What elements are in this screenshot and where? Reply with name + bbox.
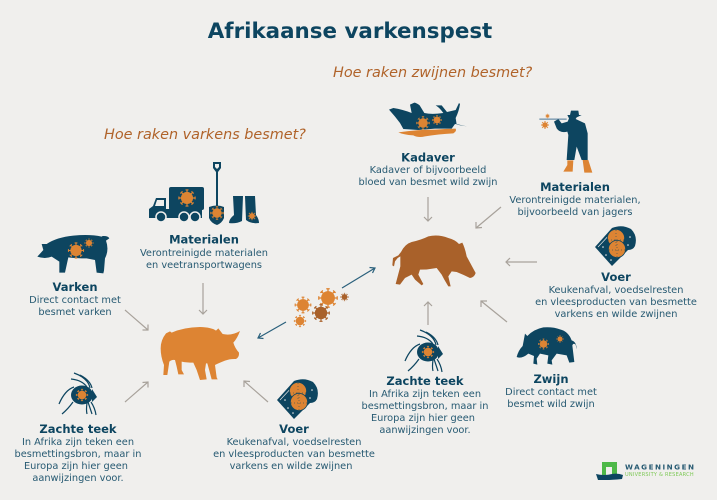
panel: voer zwijnen: [535, 226, 697, 320]
label: materialen: [509, 180, 641, 218]
label: zwijn: besmet wild zwijn: [507, 399, 595, 410]
label: zachte teek: [15, 422, 141, 484]
label: voer: Keukenafval, voedselresten: [549, 285, 683, 296]
label: materialen: en veetransportwagens: [146, 260, 262, 271]
label: varken: Direct contact met: [29, 295, 121, 306]
icon: food: [595, 226, 636, 266]
icon: navy boar: [517, 327, 577, 365]
logo: wageningen: WAGENINGEN: [625, 462, 696, 472]
label: voer: Voer: [279, 422, 309, 436]
panel: voer varkens: [213, 379, 375, 472]
title: Afrikaanse varkenspest: [208, 19, 492, 44]
icon: brown boar: [392, 235, 476, 286]
label: kadaver: Kadaver: [401, 150, 455, 164]
heading: hoe raken zwijnen besmet: Hoe raken zwijnen besmet?: [333, 65, 533, 81]
panel: materialen zwijnen: [509, 111, 641, 218]
panel: zwijn: [505, 327, 597, 410]
panel: zachte teek varkens: [15, 373, 141, 484]
label: voer: varkens en wilde zwijnen: [230, 461, 352, 472]
label: zachte teek: Europa zijn hier geen: [371, 413, 475, 424]
label: materialen: Materialen: [540, 180, 610, 194]
panel: kadaver: [359, 103, 497, 188]
icon: boots: [229, 196, 259, 223]
label: varken: Varken: [52, 280, 98, 294]
label: voer: Voer: [601, 270, 631, 284]
panel: materialen varkens: [140, 162, 268, 271]
icon: hunter: [539, 111, 592, 173]
label: materialen: Materialen: [169, 232, 239, 246]
label: varken: [29, 280, 121, 318]
label: zachte teek: Zachte teek: [386, 374, 464, 388]
label: zachte teek: In Afrika zijn teken een: [369, 389, 481, 400]
label: zachte teek: besmettingsbron, maar in: [362, 401, 488, 412]
label: voer: en vleesproducten van besmette: [213, 449, 375, 460]
label: materialen: Verontreinigde materialen: [140, 248, 268, 259]
label: voer: [213, 422, 375, 472]
label: voer: Keukenafval, voedselresten: [227, 437, 361, 448]
icon: orange pig: [161, 327, 240, 380]
label: kadaver: Kadaver of bijvoorbeeld: [370, 165, 486, 176]
label: voer: [535, 270, 697, 320]
label: kadaver: [359, 150, 497, 188]
icon: carcass: [389, 103, 467, 137]
icon: truck: [149, 187, 204, 222]
icon: shovel: [209, 162, 224, 225]
label: materialen: [140, 232, 268, 271]
label: zachte teek: Zachte teek: [39, 422, 117, 436]
label: zachte teek: aanwijzingen voor.: [32, 473, 124, 484]
label: zachte teek: In Afrika zijn teken een: [22, 437, 134, 448]
icon: virus cluster: [294, 289, 348, 327]
panel: zachte teek zwijnen: [362, 330, 488, 436]
label: voer: en vleesproducten van besmette: [535, 297, 697, 308]
arrows: blue transmission: [258, 268, 375, 338]
arrows: grey sources to animals: [125, 197, 537, 402]
icon: tick: [405, 330, 443, 372]
label: materialen: bijvoorbeeld van jagers: [517, 207, 633, 218]
label: kadaver: bloed van besmet wild zwijn: [359, 177, 497, 188]
label: varken: besmet varken: [38, 307, 112, 318]
label: materialen: Verontreinigde materialen,: [509, 195, 641, 206]
heading: hoe raken varkens besmet: Hoe raken varkens besmet?: [104, 127, 306, 143]
label: zwijn: Zwijn: [533, 372, 569, 386]
icon: tick: [59, 373, 97, 415]
icon: pig with virus: [37, 235, 109, 273]
label: zachte teek: aanwijzingen voor.: [379, 425, 471, 436]
label: zwijn: Direct contact met: [505, 387, 597, 398]
panel: varken: [29, 235, 121, 318]
label: voer: varkens en wilde zwijnen: [555, 309, 677, 320]
label: zwijn: [505, 372, 597, 410]
label: zachte teek: besmettingsbron, maar in: [15, 449, 141, 460]
icon: food: [277, 379, 318, 419]
label: zachte teek: [362, 374, 488, 436]
logo: wageningen: [596, 462, 696, 480]
label: zachte teek: Europa zijn hier geen: [24, 461, 128, 472]
logo: wageningen: UNIVERSITY & RESEARCH: [625, 472, 694, 478]
